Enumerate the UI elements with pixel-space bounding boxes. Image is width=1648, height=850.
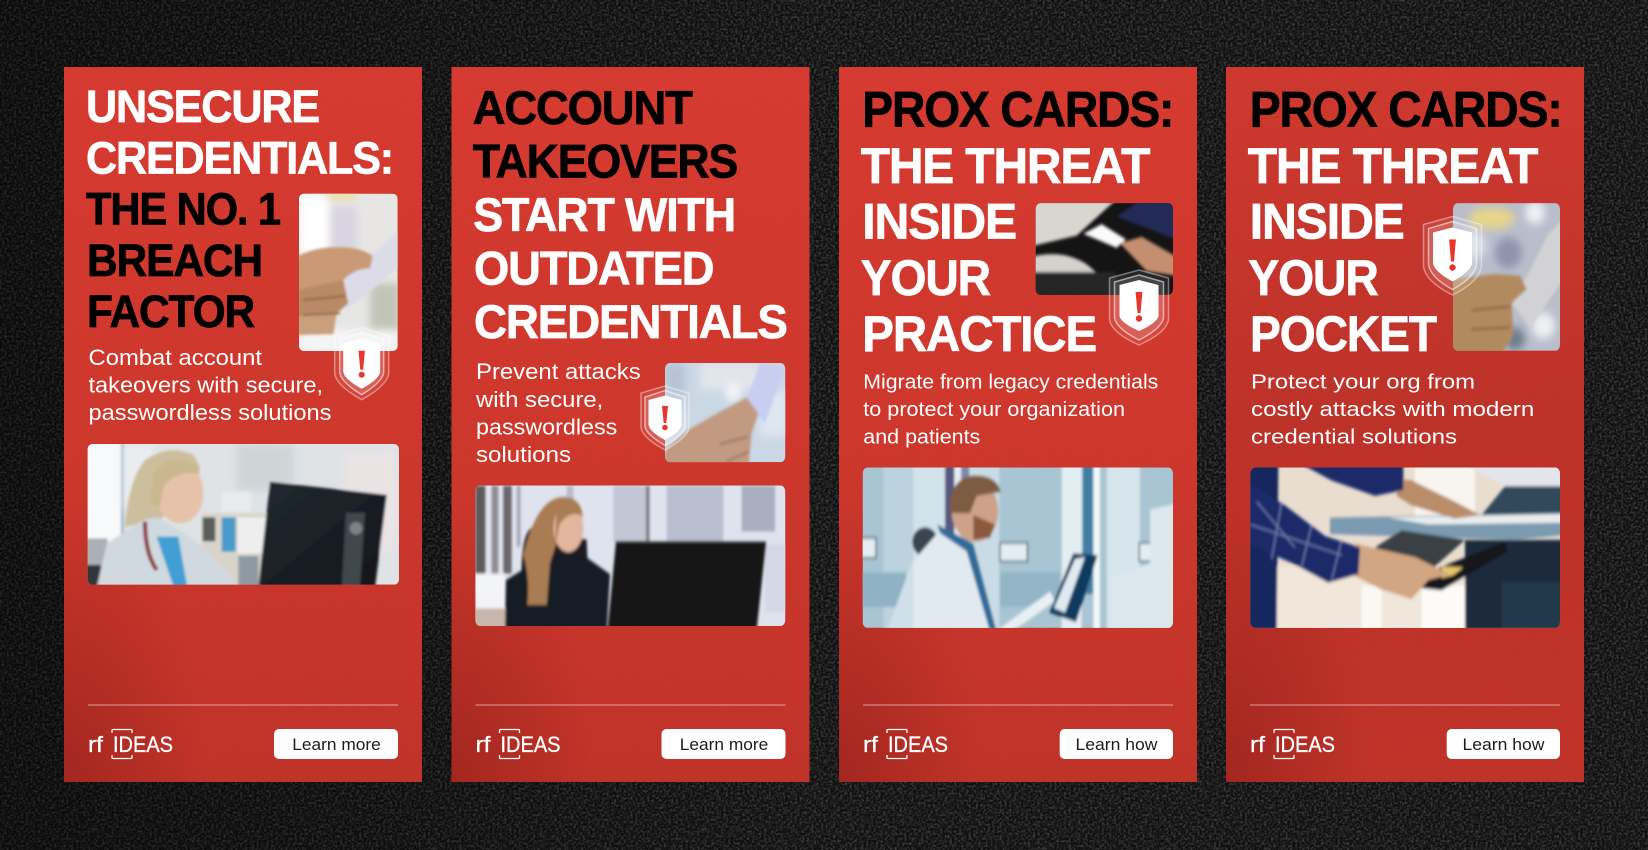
heading: OUTDATED — [474, 242, 713, 295]
heading: START WITH — [473, 188, 735, 241]
panel: banner 2 account takeovers — [452, 67, 810, 782]
subheading: to protect your organization — [863, 398, 1125, 421]
subheading: Prevent attacks — [476, 359, 641, 384]
logo: rf IDEAS — [88, 730, 173, 758]
divider — [88, 704, 398, 706]
icon: shield alert — [1424, 216, 1482, 295]
button: learn more: Learn more — [292, 736, 381, 754]
divider — [476, 704, 786, 706]
logo: rf IDEAS: rf — [1250, 732, 1266, 757]
button: learn how: Learn how — [1076, 736, 1158, 754]
logo: rf IDEAS — [476, 730, 560, 758]
photo: hand holding card — [297, 192, 400, 353]
photo: doctor at computer — [83, 440, 399, 588]
button: learn more: Learn more — [680, 736, 768, 754]
button: learn more — [274, 729, 398, 759]
logo: rf IDEAS: IDEAS — [113, 732, 173, 757]
divider — [863, 704, 1173, 706]
heading — [1248, 82, 1562, 362]
icon: shield alert — [1110, 270, 1168, 345]
photo: scientist at terminal — [860, 463, 1176, 632]
panel: banner 4 prox cards pocket — [1226, 67, 1584, 782]
logo: rf IDEAS: IDEAS — [888, 732, 948, 757]
photo: hand holding card — [662, 363, 787, 467]
heading: THE NO. 1 — [86, 184, 280, 234]
subheading: costly attacks with modern — [1251, 398, 1534, 421]
card background — [1226, 67, 1584, 782]
button: learn how — [1447, 729, 1560, 759]
subheading: and patients — [863, 425, 980, 448]
logo: rf IDEAS: rf — [863, 732, 879, 757]
heading: CREDENTIALS — [474, 295, 787, 348]
icon: shield alert — [641, 386, 689, 450]
subheading — [1251, 371, 1534, 448]
heading — [861, 82, 1173, 362]
heading: TAKEOVERS — [473, 134, 737, 188]
heading — [86, 81, 393, 337]
subheading — [863, 371, 1158, 448]
subheading: with secure, — [475, 387, 603, 412]
subheading: Combat account — [88, 345, 263, 370]
heading: PRACTICE — [862, 306, 1096, 362]
subheading: passwordless — [476, 415, 617, 440]
subheading: credential solutions — [1251, 425, 1457, 448]
heading: POCKET — [1250, 306, 1437, 362]
logo: rf IDEAS: IDEAS — [1275, 732, 1335, 757]
subheading: Protect your org from — [1251, 371, 1475, 394]
heading: PROX CARDS: — [1250, 82, 1562, 138]
heading: PROX CARDS: — [862, 82, 1173, 138]
logo: rf IDEAS: IDEAS — [500, 732, 560, 757]
icon: shield alert — [335, 328, 389, 400]
photo: hand holding card — [1450, 201, 1563, 355]
logo: rf IDEAS: rf — [476, 732, 491, 757]
logo: rf IDEAS — [1250, 730, 1335, 758]
divider — [1250, 704, 1560, 706]
subheading: passwordless solutions — [88, 400, 332, 425]
heading: ACCOUNT — [473, 81, 693, 134]
panel: banner 1 unsecure credentials — [64, 67, 422, 782]
heading: UNSECURE — [86, 81, 319, 132]
card background — [839, 67, 1197, 782]
heading — [473, 81, 787, 348]
heading: THE THREAT — [1248, 138, 1538, 194]
card background — [452, 67, 810, 782]
subheading — [475, 359, 641, 467]
button: learn how: Learn how — [1462, 736, 1545, 754]
subheading: Migrate from legacy credentials — [863, 371, 1158, 394]
heading: YOUR — [861, 250, 991, 306]
heading: YOUR — [1248, 250, 1379, 306]
photo: person using copier — [1247, 463, 1563, 632]
subheading: takeovers with secure, — [88, 372, 323, 398]
button: learn more — [662, 729, 786, 759]
photo: woman at computer — [472, 486, 785, 630]
subheading: solutions — [476, 442, 571, 467]
panel: banner 3 prox cards practice — [839, 67, 1197, 782]
logo: rf IDEAS — [863, 730, 948, 758]
photo: card on reader — [1036, 203, 1173, 295]
heading: INSIDE — [862, 194, 1016, 250]
card background — [64, 67, 422, 782]
heading: CREDENTIALS: — [86, 132, 393, 184]
heading: THE THREAT — [861, 138, 1150, 194]
logo: rf IDEAS: rf — [88, 732, 104, 757]
heading: FACTOR — [87, 286, 255, 337]
heading: BREACH — [87, 235, 262, 286]
button: learn how — [1060, 729, 1173, 759]
subheading — [88, 345, 332, 425]
heading: INSIDE — [1250, 194, 1404, 250]
